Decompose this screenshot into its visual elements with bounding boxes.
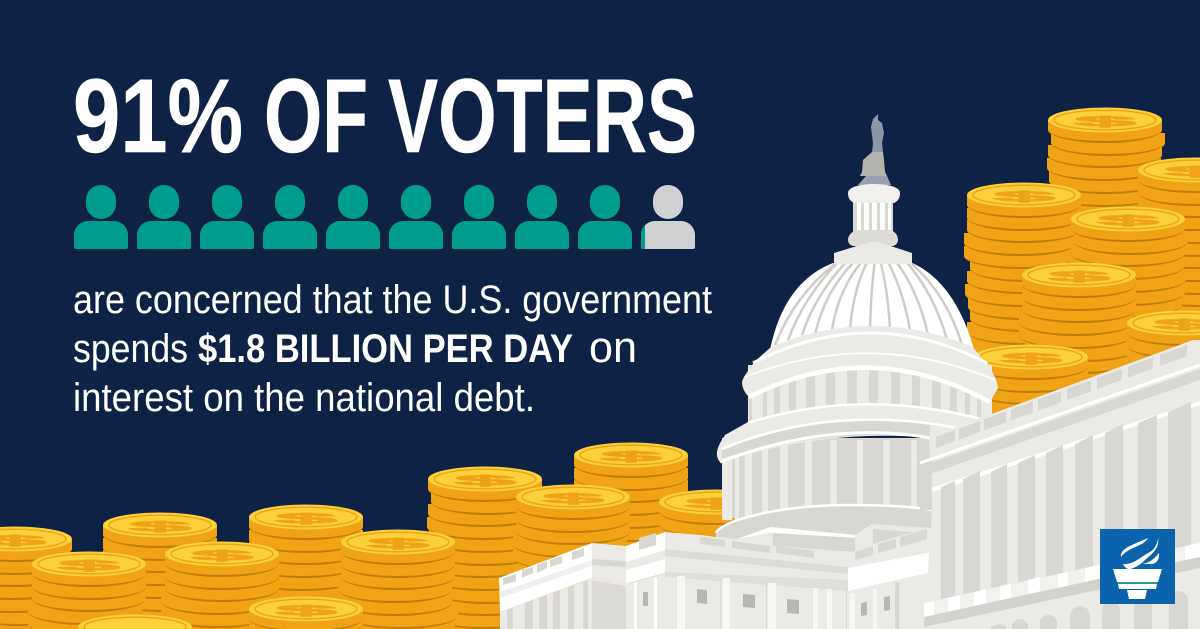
title: 91%: [73, 58, 243, 175]
coin stack: [656, 490, 773, 563]
coin stack: [970, 344, 1091, 444]
coin stack: $: [685, 496, 747, 511]
coin stack: [0, 526, 75, 629]
coin stack: $: [275, 603, 337, 618]
pictogram: 9 of 10 voters concerned: [74, 185, 695, 249]
coin stack: $: [191, 548, 253, 563]
person 10 (mostly grey): [641, 185, 695, 249]
coin stack: [1045, 108, 1165, 283]
base ring: [716, 505, 932, 560]
person 6: [389, 185, 443, 249]
person 3: [200, 185, 254, 249]
coin stack: [28, 552, 149, 629]
person 8: [515, 185, 569, 249]
person 2: [137, 185, 191, 249]
body text: on: [589, 323, 637, 372]
coin stack: $: [58, 558, 120, 573]
person 1: [74, 185, 128, 249]
coin stack: [964, 182, 1084, 358]
body text: interest on the national debt.: [73, 376, 535, 420]
coin stack: $: [1097, 213, 1159, 228]
coin stack: [1019, 262, 1139, 438]
coin stack: $: [542, 491, 604, 506]
coin stack: [513, 484, 633, 609]
lower drum: [717, 404, 985, 520]
person 4: [263, 185, 317, 249]
coin stack: [1135, 158, 1200, 333]
coin stack: $: [275, 511, 337, 526]
coin stack: [78, 614, 192, 629]
coin stack: $: [367, 536, 429, 551]
logo: torch: [1100, 529, 1175, 604]
coin stack: $: [993, 189, 1055, 204]
coin stack: [571, 442, 691, 567]
coin stacks: right: [964, 108, 1200, 444]
coin stack: $: [1074, 114, 1136, 129]
upper drum columns: [748, 365, 992, 430]
title: VOTERS: [388, 58, 697, 175]
right wing: [920, 340, 1200, 629]
dome cupola: [770, 242, 974, 350]
body text: [73, 278, 712, 420]
coin stack: [425, 466, 545, 629]
coin stack: [249, 596, 363, 629]
coin stack: $: [1000, 351, 1062, 366]
title: OF: [264, 58, 368, 175]
coin stack: $: [129, 519, 191, 534]
body text: spends: [73, 327, 188, 371]
person 5: [326, 185, 380, 249]
coin stack: [161, 542, 282, 629]
dome lantern: [848, 184, 900, 246]
body text: $1.8 BILLION PER DAY: [198, 327, 573, 371]
capitol building: [499, 114, 1200, 629]
coin stack: $: [454, 473, 516, 488]
title: [73, 58, 697, 175]
coin stack: $: [600, 449, 662, 464]
coin stack: [338, 530, 458, 629]
coin stack: $: [1048, 269, 1110, 284]
person 9: [578, 185, 632, 249]
coin stack: [1124, 310, 1200, 435]
left wing: [499, 532, 665, 629]
person 7: [452, 185, 506, 249]
dome statue: [858, 114, 891, 185]
dome bands: [742, 326, 998, 402]
central block: [643, 524, 932, 629]
coin stack: [1068, 206, 1188, 382]
coin stack: [100, 512, 220, 629]
coin stack: [246, 504, 366, 629]
body text: are concerned that the U.S. government: [73, 278, 712, 322]
coin stacks: left: [0, 442, 773, 629]
